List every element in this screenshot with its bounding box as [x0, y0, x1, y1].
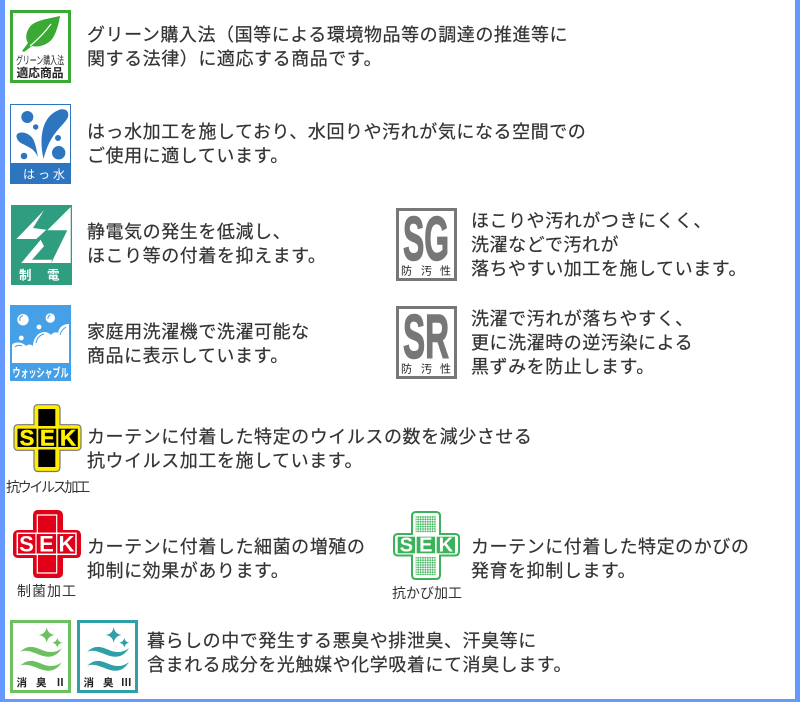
text: deodorant description [147, 631, 572, 675]
text: antiviral description: 抗ウイルス加工を施しています。 [87, 451, 363, 471]
text: SG description: 洗濯などで汚れが [471, 235, 619, 255]
text: green purchasing description: グリーン購入法（国等による環境物品等の調達の推進等に [87, 25, 568, 45]
text: SG description: 落ちやすい加工を施しています。 [471, 259, 747, 279]
caption: antiviral: 抗ウイルス加工 [6, 479, 88, 495]
text: SR description: 黒ずみを防止します。 [471, 357, 655, 377]
icon: SEK anti-mold green cross: S [400, 534, 413, 556]
text: water repellent description [87, 122, 586, 166]
icon: washable: ウォッシャブル [12, 365, 69, 380]
icon: SR stain resistance [396, 303, 457, 379]
icon: deodorant II: 消臭Ⅱ [16, 676, 66, 689]
icon: SR stain resistance: SR [403, 303, 449, 372]
frame: left blue strip [0, 0, 5, 702]
icon: SR stain resistance: 防汚性 [401, 362, 451, 376]
icon: deodorant II [10, 620, 71, 693]
text: anti-mold description: カーテンに付着した特定のかびの [471, 537, 749, 557]
icon: SEK antiviral yellow cross: E [40, 426, 55, 450]
text: antistatic description: ほこり等の付着を抑えます。 [87, 246, 326, 266]
text: green purchasing description [87, 25, 568, 69]
text: SR description [471, 309, 694, 377]
icon: green purchasing law leaf: 適応商品 [16, 65, 64, 80]
icon: SEK anti-mold green cross: E [419, 534, 432, 556]
text: antistatic description: 静電気の発生を低減し、 [87, 222, 291, 242]
text: antiviral description: カーテンに付着した特定のウイルスの数を減少させる [87, 427, 532, 447]
icon: water repellent [10, 104, 71, 184]
icon: SEK anti-mold green cross: K [439, 534, 454, 556]
text: antibacterial description: 抑制に効果があります。 [87, 561, 289, 581]
text: antistatic description [87, 222, 326, 266]
icon: SEK antiviral yellow cross: S [20, 426, 34, 450]
icon: antistatic [11, 205, 72, 285]
frame: right blue strip [795, 0, 800, 702]
caption: antibacterial: 制菌加工 [17, 583, 77, 599]
text: washable description: 商品に表示しています。 [87, 346, 289, 366]
icon: SEK antibacterial red cross: E [39, 532, 54, 556]
text: SR description: 洗濯で汚れが落ちやすく、 [471, 309, 694, 329]
icon: antistatic: 制電 [19, 268, 60, 282]
icon: SG stain resistance [396, 205, 457, 281]
text: water repellent description: はっ水加工を施しており、水回りや汚れが気になる空間での [87, 122, 586, 142]
icon: washable [10, 305, 71, 381]
icon: SEK antiviral yellow cross: K [60, 426, 76, 450]
text: antibacterial description: カーテンに付着した細菌の増殖の [87, 537, 365, 557]
text: washable description [87, 322, 310, 366]
text: green purchasing description: 関する法律）に適応する商品です。 [87, 49, 382, 69]
icon: SEK antibacterial red cross: K [59, 532, 75, 556]
icon: SEK anti-mold green cross [393, 511, 460, 580]
text: SG description [471, 211, 747, 279]
frame: bottom blue strip [0, 699, 800, 702]
icon: SEK antibacterial red cross: S [19, 532, 34, 556]
text: water repellent description: ご使用に適しています。 [87, 146, 289, 166]
icon: SEK antiviral yellow cross [13, 404, 82, 472]
text: anti-mold description: 発育を抑制します。 [471, 561, 636, 581]
text: antibacterial description [87, 537, 365, 581]
icon: green purchasing law leaf: グリーン購入法 [16, 53, 64, 67]
icon: deodorant III: 消臭Ⅲ [84, 676, 132, 689]
text: SG description: ほこりや汚れがつきにくく、 [471, 211, 712, 231]
text: washable description: 家庭用洗濯機で洗濯可能な [87, 322, 310, 342]
text: SR description: 更に洗濯時の逆汚染による [471, 333, 693, 353]
caption: anti-mold: 抗かび加工 [392, 585, 462, 601]
text: anti-mold description [471, 537, 749, 581]
icon: SEK antibacterial red cross [13, 510, 81, 578]
icon: green purchasing law leaf [10, 10, 71, 83]
icon: SG stain resistance: 防汚性 [401, 264, 451, 278]
icon: SG stain resistance: SG [403, 205, 449, 274]
icon: deodorant III [77, 620, 138, 693]
text: deodorant description: 含まれる成分を光触媒や化学吸着にて消臭します。 [147, 655, 572, 675]
text: antiviral description [87, 427, 532, 471]
text: deodorant description: 暮らしの中で発生する悪臭や排泄臭、汗臭等に [147, 631, 537, 651]
icon: water repellent: はっ水 [23, 168, 65, 182]
